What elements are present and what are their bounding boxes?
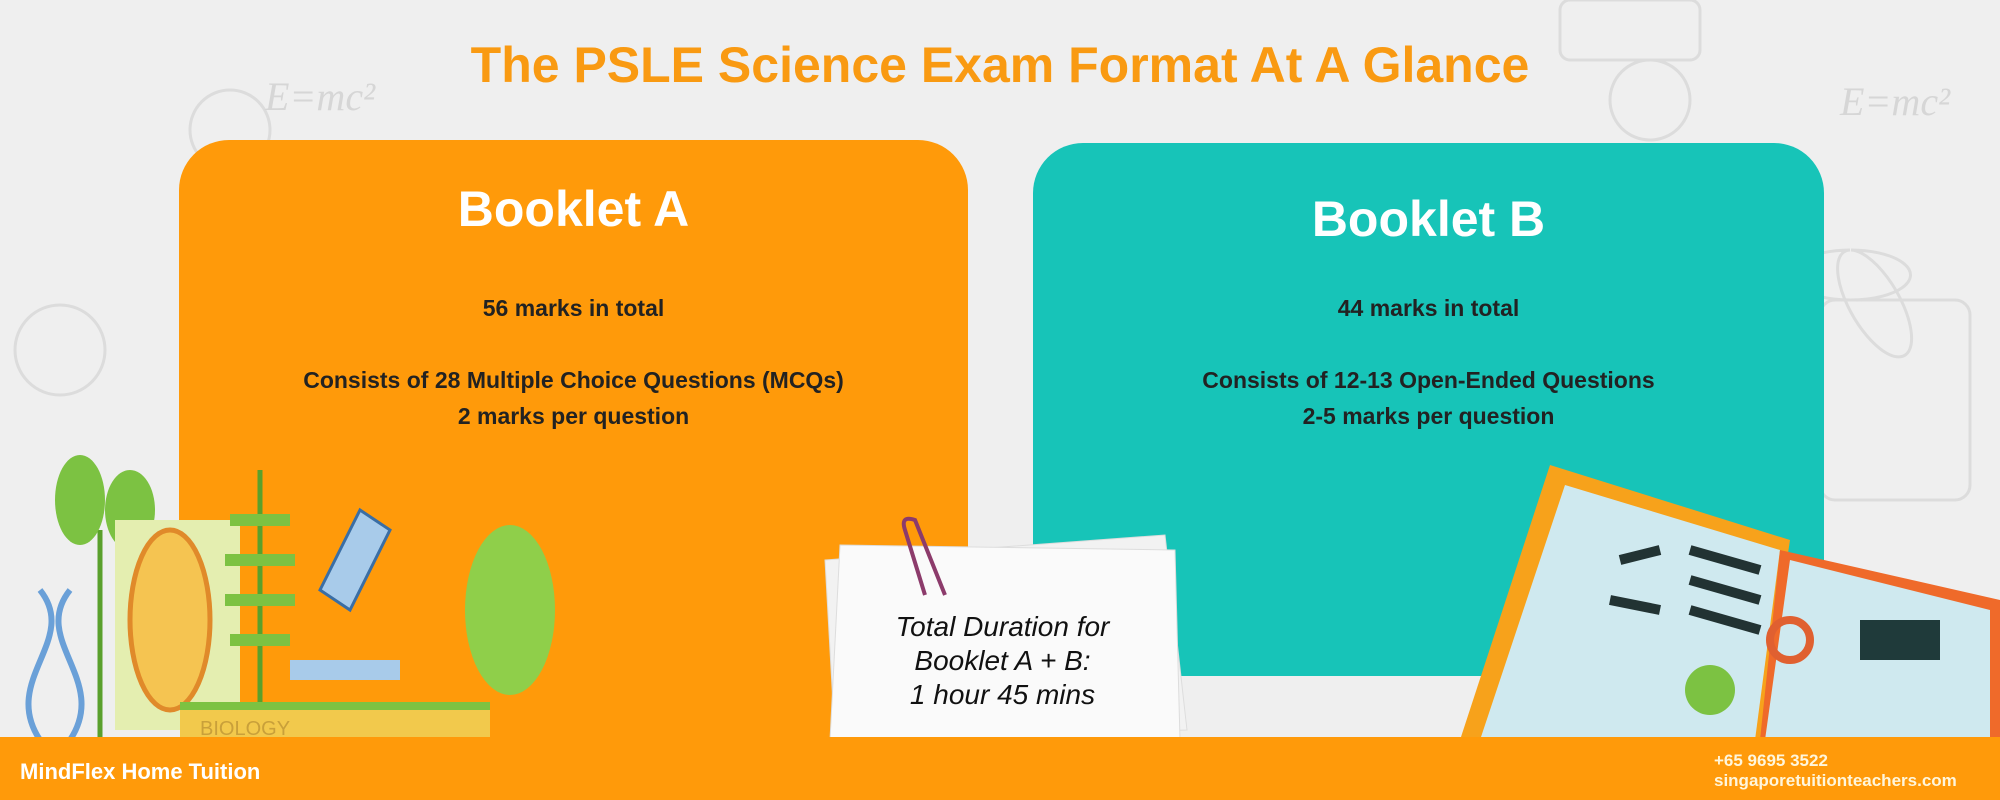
background doodles: E=mc²: [1839, 79, 1951, 124]
background doodles: E=mc²: [264, 74, 376, 119]
text: Booklet B details: 2-5 marks per question: [1303, 403, 1554, 429]
note: total duration: [824, 516, 1188, 737]
title: The PSLE Science Exam Format At A Glance: [471, 37, 1529, 93]
text: Booklet A details: 56 marks in total: [483, 295, 664, 321]
text: Booklet B details: Consists of 12-13 Open-Ended Questions: [1202, 367, 1655, 393]
illustration: science props left: [26, 455, 555, 740]
illustration: open book: [1461, 465, 2000, 737]
text: Booklet B details: [1202, 295, 1655, 429]
footer: contact: [1714, 751, 1957, 790]
panel: Booklet A: [179, 140, 968, 750]
text: Booklet A details: 2 marks per question: [458, 403, 689, 429]
footer: contact: +65 9695 3522: [1714, 751, 1828, 770]
panel: Booklet B: [1033, 143, 1824, 676]
illustration: science props left: BIOLOGY: [200, 718, 290, 740]
text: Booklet A details: [303, 295, 844, 429]
footer: brand: MindFlex Home Tuition: [20, 759, 260, 784]
text: Booklet A details: Consists of 28 Multiple Choice Questions (MCQs): [303, 367, 844, 393]
text: duration: Booklet A + B:: [914, 645, 1091, 676]
text: duration: Total Duration for: [896, 611, 1109, 642]
text: duration: 1 hour 45 mins: [910, 679, 1095, 710]
footer: contact: singaporetuitionteachers.com: [1714, 771, 1957, 790]
heading: Booklet A: Booklet A: [458, 181, 689, 237]
text: duration: [896, 611, 1110, 710]
heading: Booklet B: Booklet B: [1312, 191, 1545, 247]
footer bar: [0, 737, 2000, 800]
text: Booklet B details: 44 marks in total: [1338, 295, 1519, 321]
